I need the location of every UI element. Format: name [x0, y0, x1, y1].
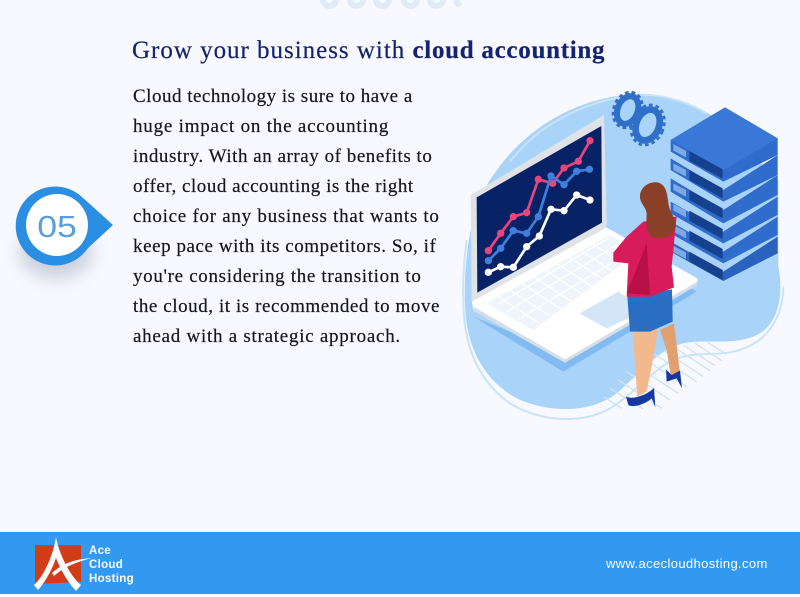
white line [488, 195, 590, 272]
keyboard [487, 235, 637, 330]
footer bar [0, 532, 800, 594]
logo [34, 537, 134, 591]
body text: keep pace with its competitors. So, if [133, 236, 436, 257]
legs [633, 328, 658, 397]
laptop shadow [473, 283, 697, 372]
jacket [613, 217, 677, 297]
laptop base [472, 227, 697, 363]
skirt [627, 289, 673, 332]
number badge 05: 05 [37, 210, 77, 244]
number badge 05 [13, 186, 113, 286]
body text: you're considering the transition to [133, 266, 422, 287]
laptop screen [471, 115, 607, 302]
woman [613, 182, 682, 407]
blob outline [463, 95, 783, 419]
logo text: Hosting [89, 573, 134, 585]
body text: industry. With an array of benefits to [133, 146, 432, 167]
floor hatch [603, 342, 727, 409]
title: Grow your business with cloud accounting [132, 37, 605, 64]
blue line [488, 169, 589, 261]
body text: offer, cloud accounting is the right [133, 176, 414, 197]
illustration: cloud accounting [462, 91, 784, 420]
trackpad [579, 292, 647, 328]
decorative top scallops [320, 0, 462, 9]
gears [608, 88, 670, 150]
body text: the cloud, it is recommended to move [133, 296, 440, 317]
shoes [626, 388, 655, 407]
logo mark [34, 537, 92, 591]
website url: www.acecloudhosting.com [606, 556, 768, 571]
body text: ahead with a strategic approach. [133, 326, 401, 347]
logo text [89, 545, 134, 585]
server stack [671, 107, 778, 281]
body text: choice for any business that wants to [133, 206, 440, 227]
hair [640, 182, 675, 238]
red line [488, 141, 590, 251]
body text: Cloud technology is sure to have a [133, 86, 413, 107]
body text: huge impact on the accounting [133, 116, 389, 137]
logo text: Cloud [89, 559, 123, 571]
logo text: Ace [89, 545, 111, 557]
body text [133, 86, 440, 347]
background blob [465, 94, 780, 409]
line chart [485, 137, 594, 276]
